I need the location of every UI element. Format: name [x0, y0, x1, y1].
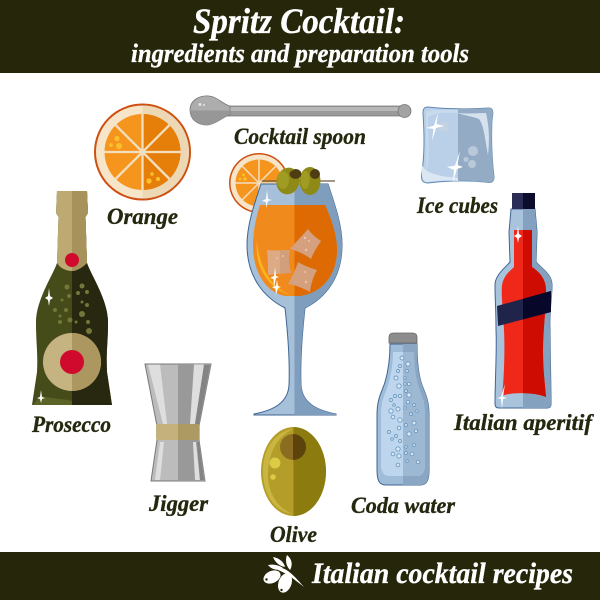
ice cubes in glass: [267, 229, 321, 292]
sparkles: [262, 190, 281, 295]
bubbles: [53, 284, 92, 334]
small orange garnish: [229, 153, 289, 213]
icon: olive: [261, 427, 326, 516]
aperitif band: [497, 291, 551, 326]
header banner: [0, 0, 600, 73]
title: Spritz Cocktail:: [193, 1, 405, 41]
label: ice cubes: Ice cubes: [416, 193, 498, 218]
icon: jigger: [145, 364, 211, 481]
icon: spritz glass: [229, 153, 342, 415]
label: orange: Orange: [107, 204, 178, 229]
icon: italian aperitif bottle: [495, 193, 552, 409]
icon: prosecco bottle: [32, 191, 112, 405]
bottle cap: [512, 193, 535, 209]
label: olive: Olive: [270, 522, 317, 547]
footer text: Italian cocktail recipes: [311, 557, 573, 590]
subtitle: ingredients and preparation tools: [131, 39, 469, 68]
soda bubbles: [388, 356, 420, 467]
icon: orange slice: [94, 104, 191, 200]
label: prosecco: Prosecco: [31, 412, 111, 437]
icon: cocktail spoon: [190, 96, 411, 125]
bottle label: [43, 333, 101, 391]
glass body: [247, 184, 342, 415]
olives on skewer: [262, 165, 335, 197]
icon: coda water bottle: [377, 333, 429, 485]
label: jigger: Jigger: [148, 491, 209, 516]
icon: ice cube: [422, 107, 494, 183]
aperitif liquid: [502, 230, 546, 397]
ice highlights: [458, 113, 489, 155]
icon: olive branch: [261, 555, 304, 595]
label: italian aperitif: Italian aperitif: [453, 410, 594, 435]
jigger band: [156, 424, 199, 440]
liquid: [253, 205, 337, 296]
water fill: [381, 352, 425, 476]
footer banner: [0, 552, 600, 600]
label: coda water: Coda water: [351, 493, 456, 518]
label: cocktail spoon: Cocktail spoon: [234, 124, 366, 149]
bottle cap: [389, 333, 417, 343]
